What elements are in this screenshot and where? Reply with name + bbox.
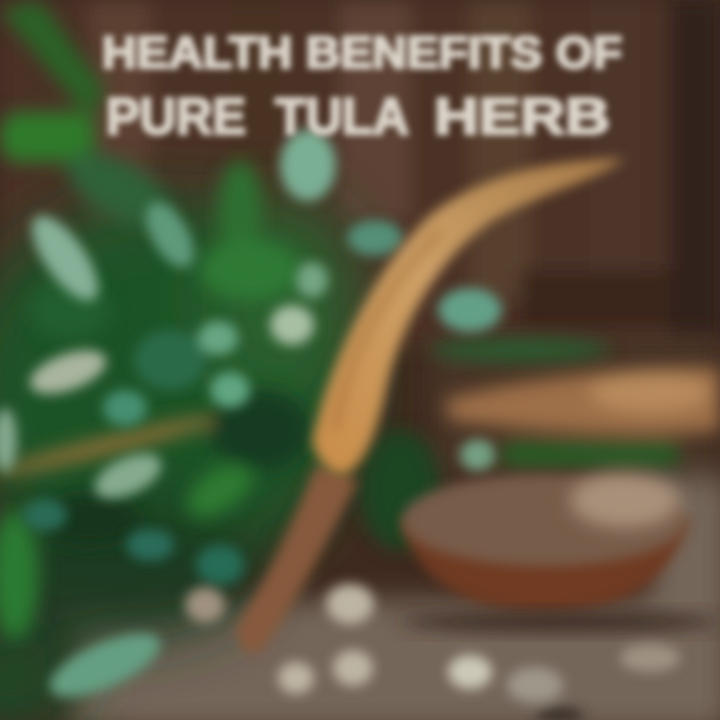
root: horizontal piece on table [445, 368, 720, 468]
root: upper golden curve [312, 158, 625, 475]
title [102, 27, 622, 146]
title: HERB [434, 88, 610, 146]
title: HEALTH BENEFITS OF [102, 27, 622, 78]
title: PURE [106, 88, 246, 146]
plant: pale leaves [0, 129, 502, 710]
background: table surface [70, 340, 720, 720]
bowl [400, 472, 720, 632]
pebbles on table [185, 584, 680, 720]
root: lower brown stem [237, 465, 358, 653]
title: TULA [275, 88, 409, 146]
